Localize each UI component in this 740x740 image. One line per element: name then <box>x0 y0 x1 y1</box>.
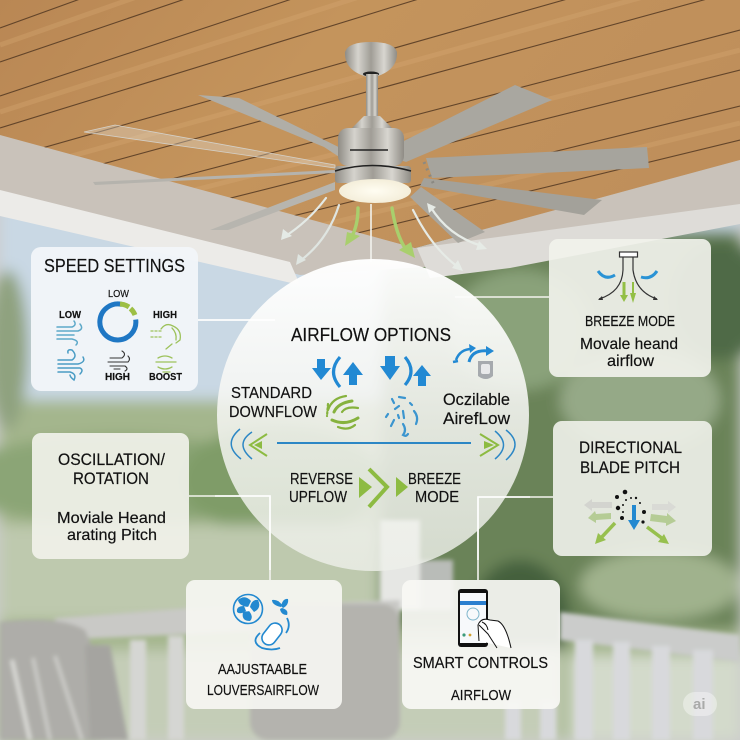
label: oscillating airflow: Oczilable <box>443 390 510 409</box>
heading: directional blade pitch: DIRECTIONAL <box>579 438 682 457</box>
label: airflow: AIRFLOW <box>451 687 512 704</box>
icon: breeze mode downrod <box>598 252 658 303</box>
panel: breeze mode <box>549 239 711 377</box>
speed labels: LOW <box>108 289 130 300</box>
icon: wind low <box>57 321 82 345</box>
label: breeze mode: BREEZE MODE <box>585 313 675 330</box>
label: breeze mode <box>408 471 461 506</box>
badge: ai watermark <box>683 692 717 716</box>
label: standard downflow: DOWNFLOW <box>229 404 318 421</box>
heading: oscillation rotation <box>58 450 165 488</box>
speed labels <box>59 289 182 383</box>
connector lines <box>189 204 553 580</box>
label: breeze mode: MODE <box>415 489 459 506</box>
icon: wind medium <box>58 350 84 380</box>
airflow arrows below fan <box>281 198 487 271</box>
label: smart controls: SMART CONTROLS <box>413 655 548 672</box>
label: reverse upflow: UPFLOW <box>289 489 348 506</box>
description: oscillation <box>57 510 166 544</box>
label: adjustable louvers: AAJUSTAABLE <box>218 661 307 678</box>
label: standard downflow <box>229 385 318 421</box>
icon: wind high <box>108 351 130 371</box>
heading: directional blade pitch <box>579 438 682 477</box>
divider with side arrows <box>231 429 515 460</box>
speed labels: HIGH <box>105 372 130 383</box>
panel: oscillation rotation <box>32 433 189 559</box>
label: standard downflow: STANDARD <box>231 385 312 402</box>
porch beam and ceiling edge <box>0 130 740 285</box>
speed labels: LOW <box>59 310 82 321</box>
icon: oscillating arrows and device <box>453 344 494 379</box>
icon: fan and louver <box>234 594 289 650</box>
description: breeze mode <box>580 336 678 370</box>
heading: airflow options: AIRFLOW OPTIONS <box>291 325 451 345</box>
speed labels: HIGH <box>153 310 177 321</box>
description: breeze mode: airflow <box>607 353 654 370</box>
wood plank ceiling <box>0 0 740 248</box>
panel: speed settings <box>31 247 198 391</box>
central circle: airflow options <box>198 259 530 571</box>
label: adjustable louvers <box>207 661 320 699</box>
label: adjustable louvers: LOUVERSAIRFLOW <box>207 682 320 699</box>
label: oscillating airflow <box>443 390 511 428</box>
ceiling fan <box>84 42 649 271</box>
panel: adjustable louvers <box>186 580 342 709</box>
panel: directional blade pitch <box>553 421 712 556</box>
icon: green direction chevrons <box>359 469 408 507</box>
panel: smart controls <box>402 580 560 709</box>
fan motor, stem and canopy <box>335 42 434 203</box>
description: breeze mode: Movale heand <box>580 336 678 353</box>
icon: phone with hand <box>458 589 511 648</box>
heading: directional blade pitch: BLADE PITCH <box>580 458 680 477</box>
label: oscillating airflow: AirefLow <box>443 409 511 428</box>
label: breeze mode: BREEZE <box>408 471 461 488</box>
heading: speed settings: SPEED SETTINGS <box>44 256 185 276</box>
icon: green swirl <box>327 396 358 429</box>
description: oscillation: arating Pitch <box>67 527 157 544</box>
icon: blade pitch arrows <box>584 490 676 544</box>
fan blades <box>84 85 649 243</box>
label: reverse upflow <box>289 471 353 506</box>
icon: speed donut <box>96 301 139 343</box>
speed labels: BOOST <box>149 372 182 383</box>
description: oscillation: Moviale Heand <box>57 510 166 527</box>
icon: blue up and down arrows <box>312 356 431 387</box>
heading: oscillation rotation: ROTATION <box>73 469 149 488</box>
badge: ai watermark: ai <box>693 696 706 713</box>
icon: blue scattered airflow <box>386 397 417 436</box>
label: reverse upflow: REVERSE <box>290 471 353 488</box>
heading: oscillation rotation: OSCILLATION/ <box>58 450 165 469</box>
icon: green high and boost <box>151 325 180 372</box>
